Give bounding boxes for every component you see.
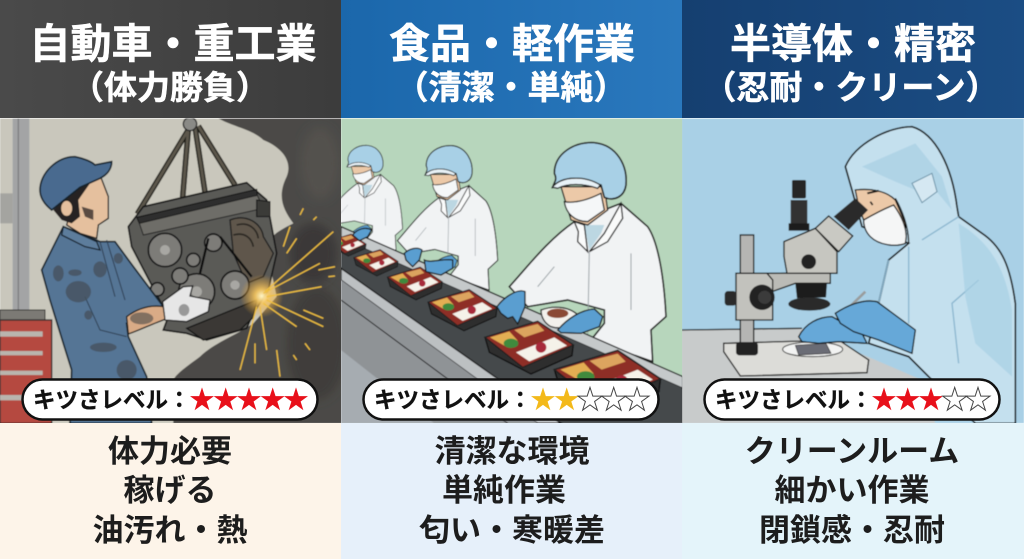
- gloves and tweezers: [836, 290, 866, 320]
- panel: auto and heavy industry: [0, 0, 347, 559]
- worker: [42, 227, 163, 423]
- text block: traits: 匂い・寒暖差: [419, 513, 605, 548]
- microscope: [724, 340, 869, 376]
- sparks: [240, 274, 283, 318]
- text block: traits: 細かい作業: [774, 473, 930, 508]
- panel: semiconductor and precision: [682, 0, 1024, 559]
- trays: [553, 348, 662, 393]
- difficulty pill: two of five stars: ：: [509, 388, 532, 413]
- difficulty pill: five red stars: ：: [168, 388, 191, 413]
- heading: semiconductor and precision: 半導体・精密: [730, 21, 976, 67]
- text block: traits: [0, 423, 341, 559]
- smoke: [173, 118, 342, 423]
- panel: food and light work: [326, 0, 683, 559]
- text block: traits: 体力必要: [108, 434, 232, 469]
- text block: traits: 稼げる: [124, 473, 216, 508]
- difficulty pill: three of five stars: ：: [850, 388, 873, 413]
- difficulty pill: three of five stars: [704, 380, 1000, 420]
- difficulty pill: five red stars: [22, 380, 318, 420]
- difficulty pill: five red stars: キツさレベル: [33, 388, 168, 413]
- heading: auto and heavy industry: 自動車・重工業: [30, 21, 316, 67]
- face and mask: [855, 189, 905, 245]
- illustration: bento conveyor line: [326, 118, 683, 423]
- heading: auto and heavy industry: （体力勝負）: [71, 69, 269, 106]
- difficulty pill: two of five stars: キツさレベル: [374, 388, 509, 413]
- text block: traits: 閉鎖感・忍耐: [759, 513, 945, 548]
- text block: traits: [341, 423, 682, 559]
- worker suit: [845, 127, 1015, 423]
- conveyor: [341, 227, 683, 388]
- text block: traits: 清潔な環境: [434, 434, 590, 469]
- heading: semiconductor and precision: （忍耐・クリーン）: [703, 69, 999, 106]
- toolbox: [0, 310, 45, 321]
- heading: auto and heavy industry: [0, 0, 341, 118]
- text block: traits: クリーンルーム: [745, 434, 959, 469]
- desk: [682, 328, 935, 423]
- engine: [128, 183, 277, 340]
- text block: traits: [682, 423, 1024, 559]
- difficulty pill: two of five stars: [364, 380, 658, 420]
- workers: [341, 144, 404, 251]
- heading: food and light work: 食品・軽作業: [389, 21, 635, 67]
- text block: traits: 単純作業: [442, 473, 566, 508]
- heading: food and light work: [341, 0, 682, 118]
- heading: food and light work: （清潔・単純）: [396, 69, 626, 106]
- illustration: technician at microscope: [682, 118, 1024, 423]
- text block: traits: 油汚れ・熱: [92, 513, 248, 548]
- difficulty pill: three of five stars: キツさレベル: [715, 388, 850, 413]
- illustration: mechanic lifting engine: [0, 117, 347, 423]
- re-drawn hands over trays: [497, 291, 525, 324]
- heading: semiconductor and precision: [682, 0, 1024, 118]
- hook and straps: [137, 126, 235, 214]
